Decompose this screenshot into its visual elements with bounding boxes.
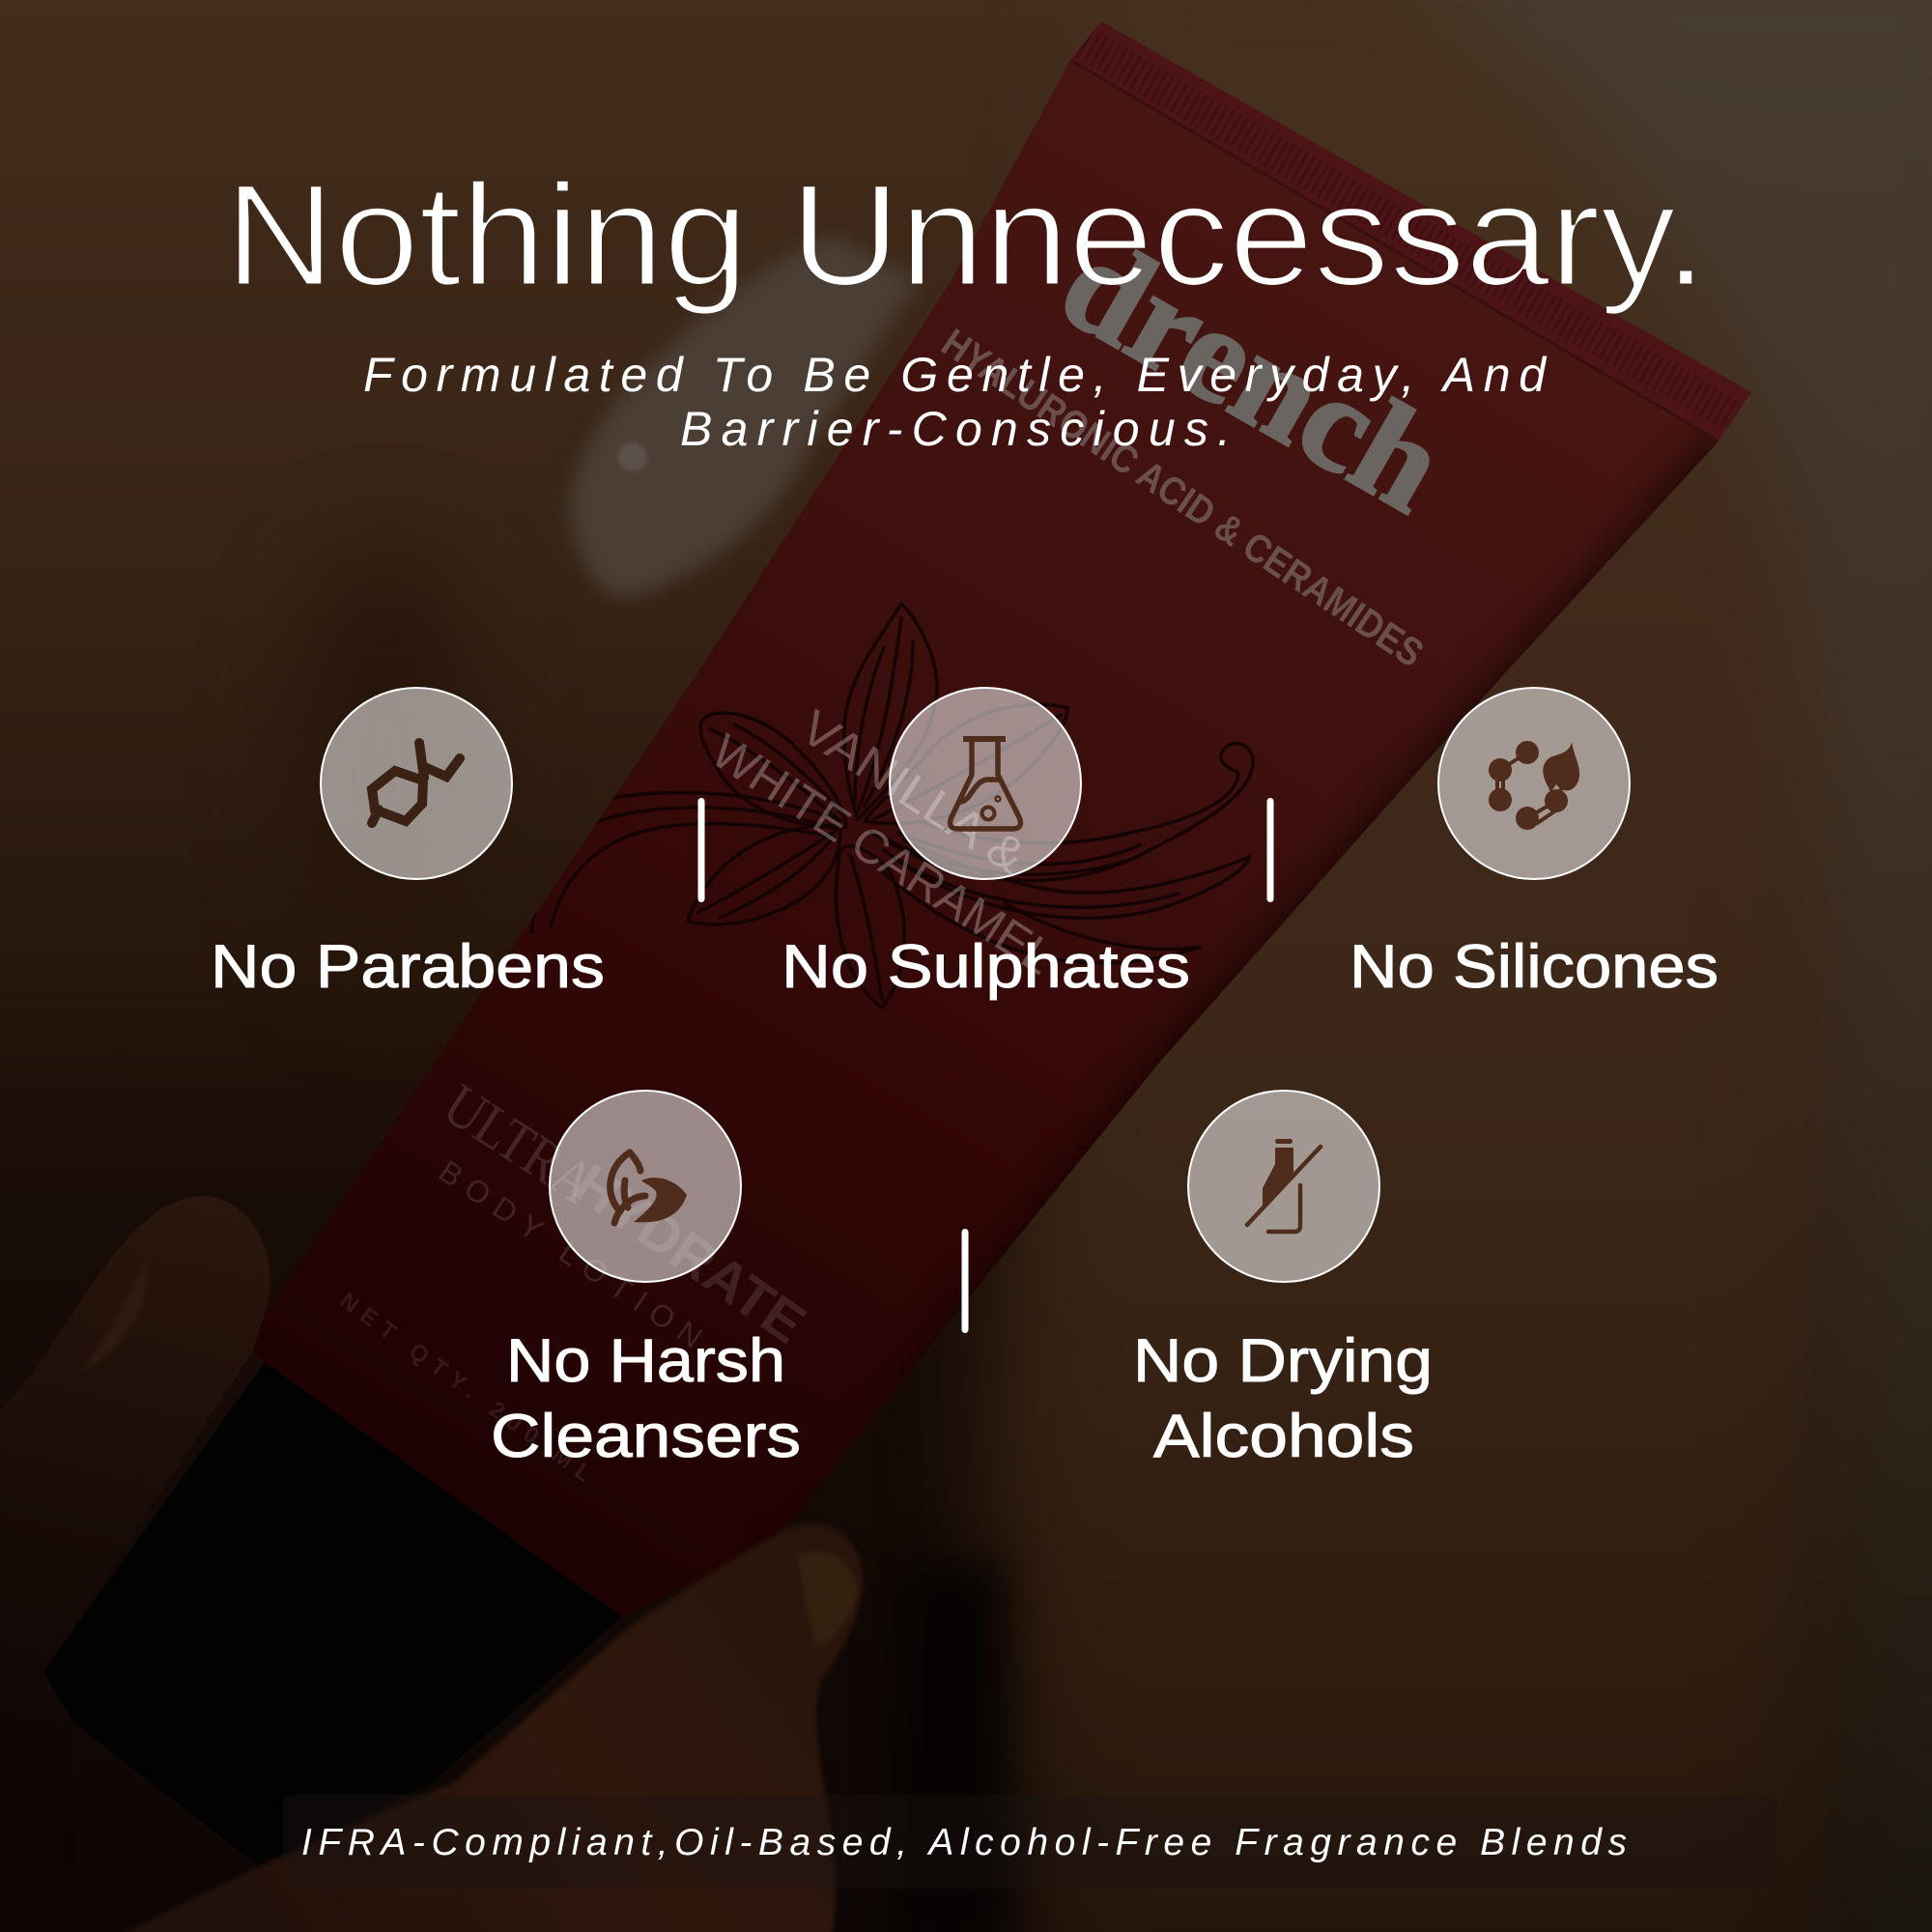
item: No Harsh Cleansers xyxy=(491,1091,801,1470)
label xyxy=(1133,1327,1433,1470)
title: Nothing Unnecessary. xyxy=(225,154,1707,316)
subtitle xyxy=(363,348,1548,456)
icon: crossed bottle xyxy=(1188,1091,1379,1282)
item: No Sulphates xyxy=(781,688,1190,1001)
label: No Harsh xyxy=(506,1327,785,1395)
divider xyxy=(962,1229,968,1333)
item: No Drying Alcohols xyxy=(1133,1091,1433,1470)
label: No Sulphates xyxy=(781,933,1190,1001)
footer note: IFRA-Compliant,Oil-Based, Alcohol-Free Fragrance Blends xyxy=(301,1822,1627,1863)
icon: molecule with leaf xyxy=(1438,688,1630,879)
divider xyxy=(697,798,705,902)
product text: HYDRATE xyxy=(563,1151,816,1355)
label: No Parabens xyxy=(211,933,605,1001)
label: Alcohols xyxy=(1153,1403,1414,1470)
vanilla flower line art xyxy=(517,604,1253,1008)
tube cap xyxy=(43,1362,622,1866)
label: No Silicones xyxy=(1350,933,1719,1001)
product text: NET QTY. 200 ML xyxy=(334,1288,596,1488)
item: No Silicones xyxy=(1350,688,1719,1001)
product text xyxy=(334,207,1468,1488)
fingers xyxy=(0,1196,863,1932)
label: No Drying xyxy=(1133,1327,1433,1395)
icon: molecule xyxy=(321,688,512,879)
icon: leaves xyxy=(550,1091,741,1282)
label: Cleansers xyxy=(491,1403,801,1470)
icon: flask xyxy=(890,688,1081,879)
product tube xyxy=(253,21,1835,1617)
divider xyxy=(1267,798,1273,902)
product text: HYALURONIC ACID & CERAMIDES xyxy=(934,320,1432,675)
item: No Parabens xyxy=(211,688,605,1001)
label xyxy=(491,1327,801,1470)
subtitle: Barrier-Conscious. xyxy=(680,402,1231,456)
product text: BODY LOTION xyxy=(433,1153,709,1355)
footer note xyxy=(283,1795,1777,1889)
subtitle: Formulated To Be Gentle, Everyday, And xyxy=(363,348,1548,402)
product text: ULTRA xyxy=(432,1072,606,1216)
product text: WHITE CARAMEL xyxy=(702,724,1064,985)
product text: drench xyxy=(1038,207,1468,541)
cream smear xyxy=(570,237,918,597)
product text: VANILLA & xyxy=(791,699,1036,885)
